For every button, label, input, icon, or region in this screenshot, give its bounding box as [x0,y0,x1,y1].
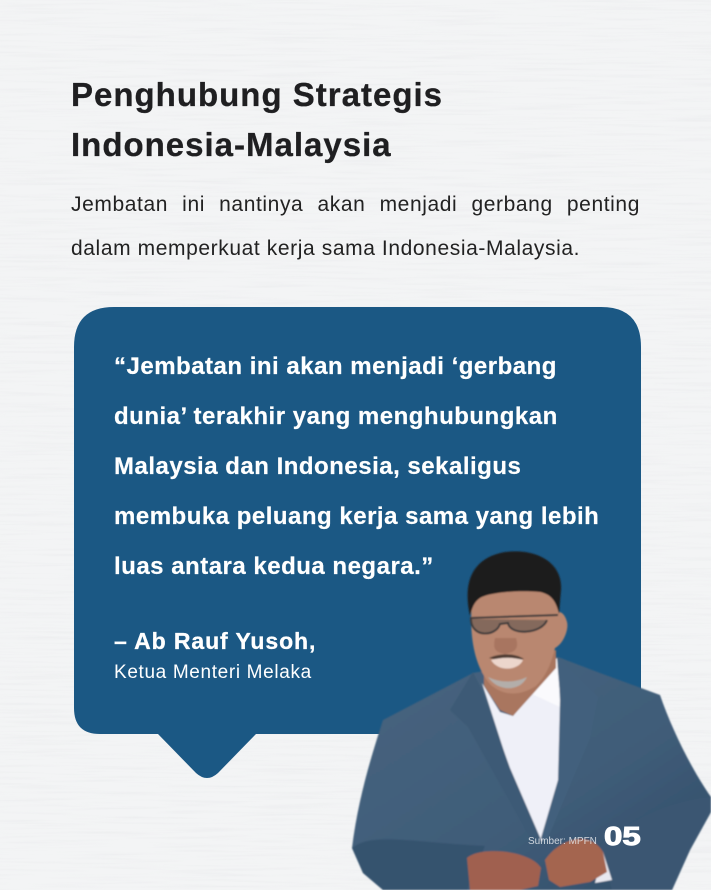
right forearm [600,797,711,890]
left forearm shadow [352,839,485,890]
nose [494,638,517,654]
right lapel [541,657,598,845]
source and page number: Sumber: MPFN [528,836,597,847]
mouth [491,658,523,669]
hands [467,851,541,890]
quote attribution [114,628,316,683]
neck [484,650,556,716]
panel: quote speech bubble [74,307,641,778]
hair [468,551,561,616]
quote text: dunia’ terakhir yang menghubungkan [114,403,558,430]
quote text: Malaysia dan Indonesia, sekaligus [114,453,521,480]
shirt cuff [595,852,612,883]
quote text: membuka peluang kerja sama yang lebih [114,503,599,530]
shirt [482,660,561,846]
jacket [352,657,711,890]
shirt collar right [515,658,560,716]
quote attribution: – Ab Rauf Yusoh, [114,628,316,654]
title: Indonesia-Malaysia [71,126,392,163]
glasses [470,615,558,634]
head [471,590,567,694]
left lapel [450,672,542,850]
intro text: Jembatan ini nantinya akan menjadi gerbang penting [71,193,640,216]
title: Penghubung Strategis [71,76,443,113]
quote attribution: Ketua Menteri Melaka [114,662,312,683]
beard [488,677,527,688]
source and page number: 05 [604,821,641,851]
title [71,76,443,164]
intro text [71,193,640,260]
mustache [489,654,524,660]
intro text: dalam memperkuat kerja sama Indonesia-Malaysia. [71,237,580,260]
quote text [114,353,599,580]
source and page number [528,821,641,851]
quote text: luas antara kedua negara.” [114,553,434,580]
quote text: “Jembatan ini akan menjadi ‘gerbang [114,353,557,380]
